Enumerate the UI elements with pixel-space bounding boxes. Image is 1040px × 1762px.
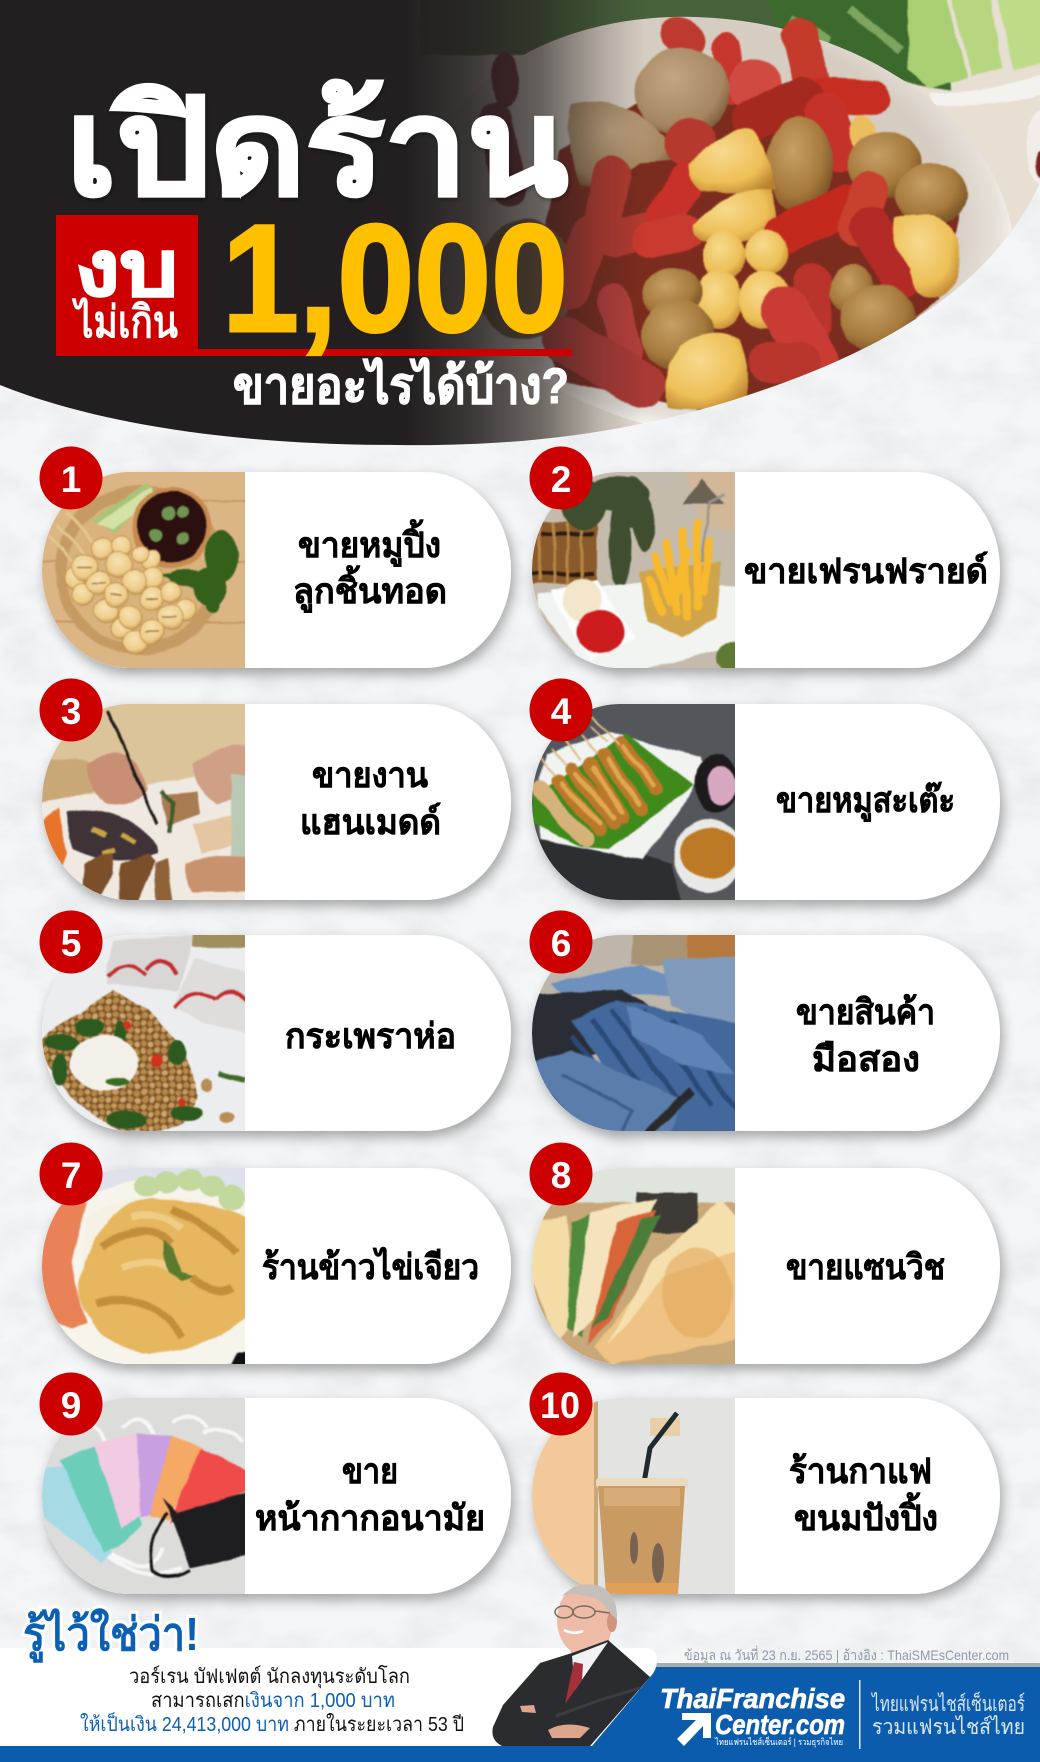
white bowl [523,16,1012,424]
card 2: french fries [522,462,1000,678]
label: แฮนเมดด์ [300,802,441,842]
badge 9: 9 [61,1385,81,1426]
label: ขายสินค้า [796,993,935,1032]
label: หน้ากากอนามัย [255,1499,485,1538]
fact text [80,1665,464,1736]
label: กระเพราห่อ [285,1017,456,1056]
hair [562,1584,617,1620]
label: ร้านกาแฟ [789,1452,932,1491]
badge 8: 8 [551,1155,571,1196]
amount: 1,000: 1,000 [222,193,568,364]
badge 7 [40,1142,102,1206]
sausage bottom left [613,300,628,352]
heading: รู้ไว้ใช่ว่า!: รู้ไว้ใช่ว่า! [23,1607,199,1663]
shirt and tie [572,1642,608,1690]
logo arrow [677,1713,711,1746]
label: ขาย [342,1452,398,1491]
label [789,1452,938,1538]
photo: satay on banana leaf [532,704,735,900]
label: ขายหมูสะเต๊ะ [776,781,955,822]
tan balls upper left [634,48,730,136]
suit [492,1640,650,1746]
label [255,1452,485,1538]
badge 10: 10 [540,1385,580,1426]
label: ขายเฟรนฟรายด์ [744,551,988,591]
badge 1 [40,446,102,510]
photo: krapao with rice and paper parcels [42,935,245,1131]
badge 3 [40,678,102,742]
left red sausages [570,175,668,290]
brown balls lower [642,267,702,319]
fact panel: white band [0,1648,657,1746]
badge 2 [530,446,592,510]
badge 8 [530,1142,592,1206]
logo: ThaiFranchise Center.com [660,1683,845,1748]
card 3: handmade crafts [32,694,511,910]
photo: meatballs on a wooden plate [42,472,245,668]
badge 6 [530,910,592,974]
photo: omelette on rice [42,1168,245,1364]
red cross sausage [800,36,812,85]
badge 7: 7 [61,1155,81,1196]
card 4: pork satay [522,694,1000,910]
small sausages behind [660,16,706,54]
badge 4 [530,678,592,742]
label: ขายแซนวิช [786,1248,945,1287]
logo: ThaiFranchise Center.com: ThaiFranchise [660,1683,845,1714]
subtitle: ขายอะไรได้บ้าง?: ขายอะไรได้บ้าง? [233,357,569,414]
food pile [475,9,968,410]
brand text: รวมแฟรนไชส์ไทย [872,1715,1025,1739]
photo: stacks of jeans [532,935,735,1131]
fact text: สามารถเสกเงินจาก 1,000 บาท [151,1690,395,1712]
badge 3: 3 [61,691,81,732]
dark overlay [0,0,636,446]
header photo panel: fried meatballs and sausages [0,0,1040,484]
card 8: sandwich [522,1158,1000,1374]
label: ลูกชิ้นทอด [293,565,447,613]
portrait: Warren Buffett [492,1584,650,1746]
label [293,519,447,613]
card 10: coffee shop and toast [532,1398,1000,1594]
yellow ball bottom [665,334,748,409]
card 5: wrapped krapao [32,925,511,1141]
logo: ThaiFranchise Center.com: ไทยแฟรนไชส์เซ็นเตอร์ | รวมธุรกิจไทย [714,1735,843,1748]
source note: ข้อมูล ณ วันที่ 23 ก.ย. 2565 | อ้างอิง : ThaiSMEsCenter.com [684,1646,1009,1664]
card 9: face masks [32,1388,511,1604]
footer bars [0,1663,1040,1762]
fact text: วอร์เรน บัฟเฟตต์ นักลงทุนระดับโลก [129,1665,410,1689]
badge 5: 5 [61,923,81,964]
label: ไม่เกิน: ไม่เกิน [72,296,178,347]
neck and head [568,1632,610,1668]
fact text: ให้เป็นเงิน 24,413,000 บาท ภายในระยะเวลา 53 ปี [80,1711,464,1736]
label: ร้านข้าวไข่เจียว [262,1246,479,1287]
yellow chunks centre [688,128,774,194]
badge 10 [530,1372,592,1436]
photo: hands painting wood craft [42,704,245,900]
photo: iced coffee [532,1398,735,1594]
card 7: omelette rice [32,1158,511,1378]
yellow balls lower [702,231,746,279]
label: มือสอง [812,1040,920,1079]
brown balls right [849,116,875,150]
label: งบ: งบ [75,227,178,312]
glasses [555,1606,610,1618]
red sausage lower [793,282,831,325]
crossed arms [556,1688,640,1716]
badge 5 [40,910,102,974]
background greens and side plate [420,0,1040,186]
title: เปิดร้าน: เปิดร้าน [66,74,568,223]
brand text [871,1690,1025,1739]
badge 6: 6 [551,923,571,964]
yellow balls right [894,214,960,298]
badge 1: 1 [61,459,81,500]
photo: coloured face masks [42,1398,245,1594]
badge 4: 4 [551,691,572,732]
card 1: grilled pork and fried meatballs [32,462,511,678]
red sausage right [783,205,847,235]
logo: ThaiFranchise Center.com: Center.com [715,1709,845,1740]
label [796,993,935,1079]
label: ขายงาน [312,756,428,795]
photo: sandwich halves [532,1168,735,1364]
label [300,756,441,842]
label: ขายหมูปิ้ง [298,519,441,567]
card 6: second-hand goods [522,925,1000,1141]
badge 9 [40,1372,102,1436]
dim sausages behind title [495,120,510,190]
budget block: red label, amount and underline [56,193,572,364]
photo: fries basket [532,472,735,668]
label: ขนมปังปิ้ง [794,1492,938,1538]
red box and underline [56,215,572,356]
badge 2: 2 [551,459,571,500]
